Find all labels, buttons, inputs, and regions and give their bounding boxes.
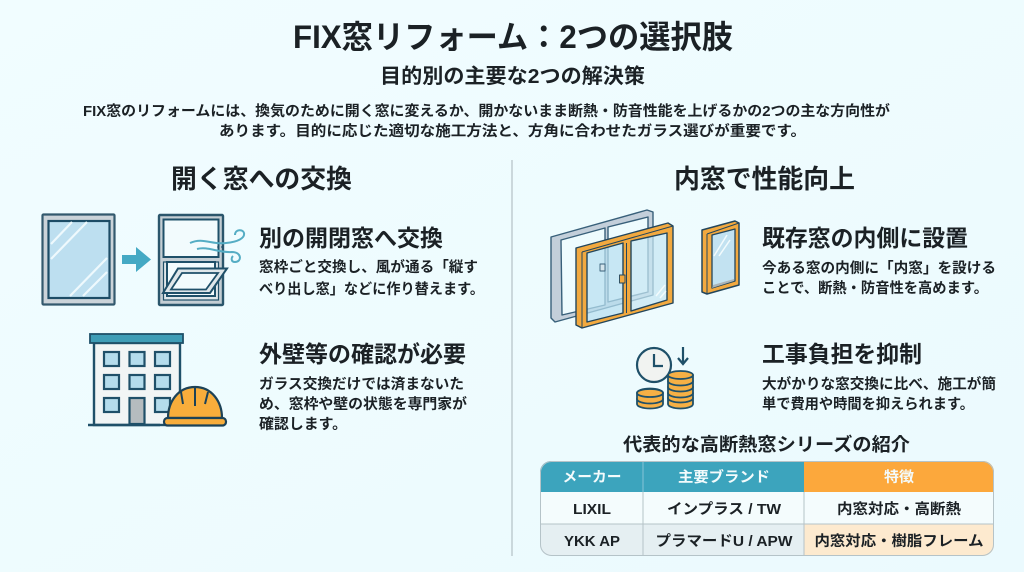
table row: YKK AP: 内窓対応・樹脂フレーム: [814, 532, 984, 550]
table row: LIXIL: [573, 500, 962, 518]
heading: reduce burden: 工事負担を抑制: [762, 341, 922, 367]
text: different opening window: 窓枠ごと交換し、風が通る「縦す: [259, 258, 478, 276]
text: install inside: 今ある窓の内側に「内窓」を設ける: [762, 259, 996, 277]
icon: small inner window: [702, 221, 739, 294]
table header: メーカー: [562, 469, 622, 486]
table row: LIXIL: 内窓対応・高断熱: [837, 500, 962, 518]
table header: [562, 468, 915, 486]
heading: install inside: 既存窓の内側に設置: [762, 225, 968, 251]
table header: 主要ブランド: [678, 468, 770, 486]
text: different opening window: [259, 258, 484, 298]
text: exterior check: め、窓枠や壁の状態を専門家が: [259, 395, 468, 413]
table: window series: [540, 461, 994, 556]
icon: opening window with wind: [159, 215, 244, 305]
table row: YKK AP: プラマードU / APW: [656, 533, 793, 550]
table row: LIXIL: LIXIL: [573, 502, 611, 518]
text: install inside: [762, 259, 996, 297]
text: install inside: ことで、断熱・防音性を高めます。: [762, 279, 988, 297]
text: reduce burden: 大がかりな窓交換に比べ、施工が簡: [762, 375, 996, 393]
table title: 代表的な高断熱窓シリーズの紹介: [623, 434, 911, 455]
text: exterior check: 確認します。: [259, 416, 347, 433]
text: different opening window: べり出し窓」などに作り替えます。: [259, 280, 484, 298]
text: reduce burden: 単で費用や時間を抑えられます。: [762, 395, 974, 413]
icon: inner window layers: [551, 210, 673, 328]
icon: arrow: [122, 247, 151, 272]
icon: building with helmet: [88, 334, 226, 426]
text: reduce burden: [762, 375, 996, 413]
table row: YKK AP: YKK AP: [564, 534, 620, 550]
icon: fixed window: [42, 214, 114, 304]
text: exterior check: [259, 375, 468, 433]
heading: inner window: 内窓で性能向上: [674, 164, 855, 194]
table row: YKK AP: [564, 532, 984, 550]
text: exterior check: ガラス交換だけでは済まないた: [259, 375, 464, 393]
intro text: あります。目的に応じた適切な施工方法と、方角に合わせたガラス選びが重要です。: [219, 122, 806, 140]
title: FIX窓リフォーム：2つの選択肢: [293, 19, 733, 55]
heading: exterior check: 外壁等の確認が必要: [259, 341, 466, 367]
subtitle: 目的別の主要な2つの解決策: [380, 65, 646, 88]
heading: different opening window: 別の開閉窓へ交換: [259, 225, 443, 251]
intro text: [83, 102, 891, 140]
icon: clock and coins: [637, 347, 693, 408]
table header: 特徴: [884, 468, 915, 486]
panel: replace with opening window: [42, 164, 484, 433]
heading: replacement: 開く窓への交換: [171, 164, 352, 194]
table row: LIXIL: インプラス / TW: [667, 501, 781, 518]
intro text: FIX窓のリフォームには、換気のために開く窓に変えるか、開かないまま断熱・防音性能を上げるかの2つの主な方向性が: [83, 102, 891, 120]
panel: inner window: [540, 164, 996, 556]
